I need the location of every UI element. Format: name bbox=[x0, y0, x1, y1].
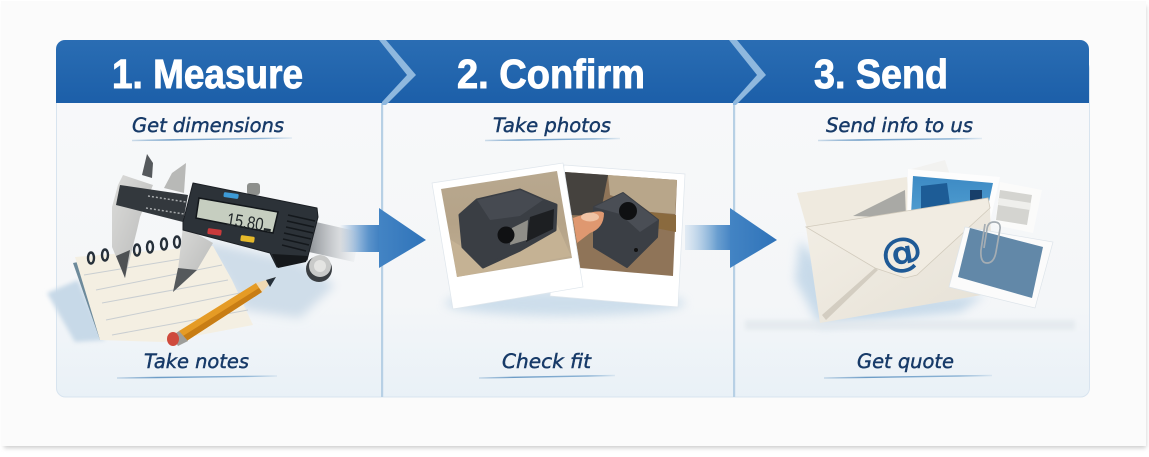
sliding jaw bbox=[173, 226, 213, 292]
front envelope bbox=[806, 198, 993, 323]
envelope flap bbox=[806, 198, 990, 278]
upper jaws bbox=[142, 154, 153, 178]
grille bbox=[282, 215, 315, 251]
illustration: photo prints bbox=[432, 163, 685, 316]
fixed jaw bbox=[112, 175, 153, 278]
panel: process body bbox=[56, 60, 1090, 397]
column dividers bbox=[381, 103, 735, 397]
photo: part on sand bbox=[432, 163, 583, 309]
heading: 2. Confirm: 2. Confirm bbox=[457, 51, 645, 97]
arrow: step 2 to 3 bbox=[685, 208, 777, 268]
illustration: envelope with attachments bbox=[745, 160, 1075, 330]
attached photo bbox=[949, 227, 1053, 308]
paperclip bbox=[981, 222, 1000, 263]
blue photo bbox=[907, 169, 1000, 222]
back envelope bbox=[797, 177, 910, 228]
label: Get dimensions: Get dimensions bbox=[132, 114, 284, 137]
label: Send info to us: Send info to us bbox=[826, 114, 973, 137]
label: Take notes: Take notes bbox=[144, 350, 249, 373]
roller bbox=[272, 254, 308, 268]
finger bbox=[573, 211, 604, 243]
chevron: step 2 to 3 bbox=[729, 40, 766, 105]
LCD: 15.80 bbox=[225, 209, 265, 235]
header band bbox=[56, 40, 1089, 103]
striped document bbox=[995, 182, 1042, 233]
display body bbox=[183, 183, 318, 267]
buttons bbox=[207, 192, 255, 243]
label: Take photos: Take photos bbox=[493, 114, 611, 137]
notepad page bbox=[75, 246, 253, 342]
thumb wheel bbox=[247, 183, 260, 195]
photo: part on wood bbox=[550, 165, 685, 307]
knob bbox=[306, 255, 332, 282]
caliper rear beam bbox=[300, 222, 360, 262]
label: Check fit: Check fit bbox=[502, 350, 592, 373]
heading: 3. Send: 3. Send bbox=[814, 51, 948, 97]
pencil bbox=[167, 277, 276, 346]
chevron: step 1 to 2 bbox=[379, 40, 416, 105]
label: Check fit bbox=[479, 350, 615, 378]
heading: 1. Measure: 1. Measure bbox=[112, 51, 303, 97]
notepad spiral bbox=[88, 236, 180, 264]
illustration: digital caliper bbox=[112, 154, 360, 292]
at sign: @ bbox=[877, 226, 926, 279]
illustration: notepad and pencil bbox=[47, 236, 335, 346]
arrow: step 1 to 2 bbox=[340, 208, 426, 268]
label: Get quote: Get quote bbox=[857, 350, 954, 373]
rear paper bbox=[908, 160, 950, 185]
main beam bbox=[116, 185, 188, 222]
LCD bbox=[196, 198, 278, 235]
